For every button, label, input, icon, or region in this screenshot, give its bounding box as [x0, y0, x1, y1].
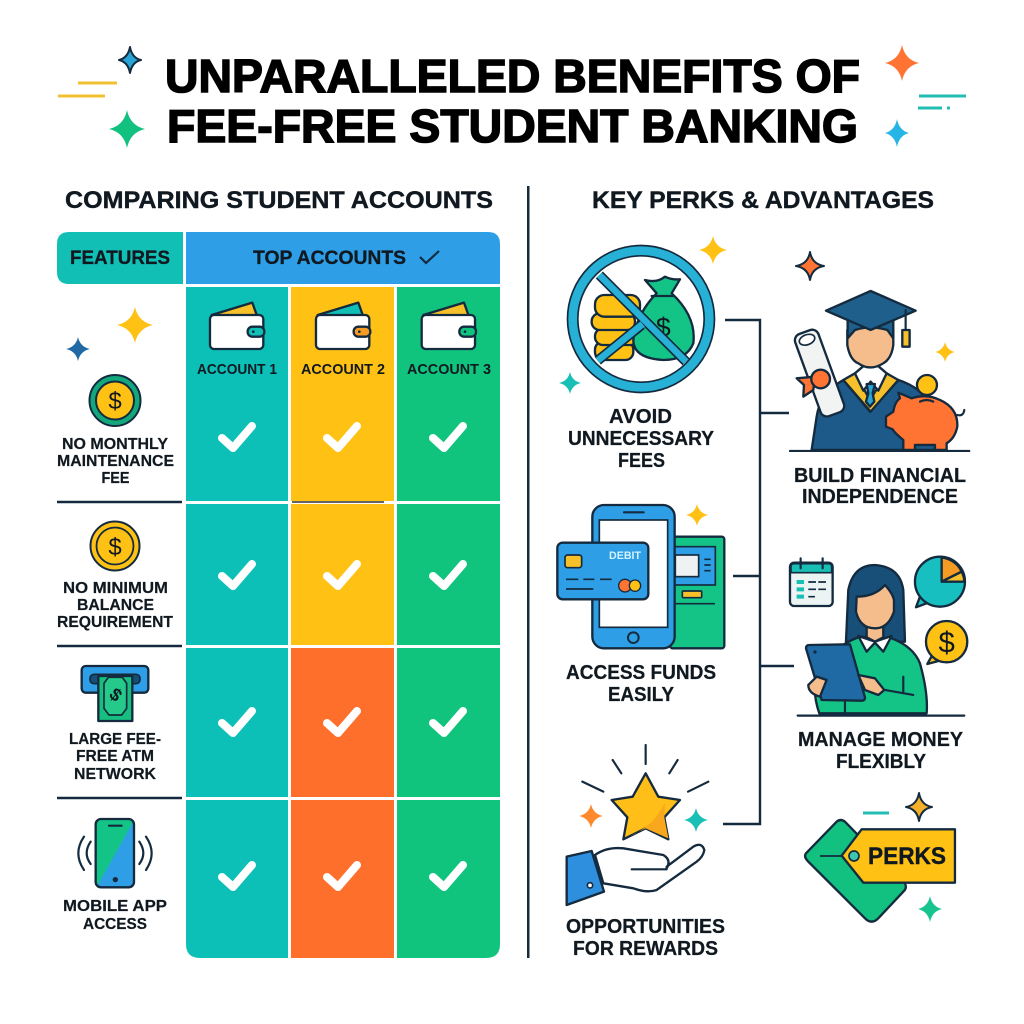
account 3 header — [407, 303, 491, 378]
account 3 header: ACCOUNT 3 — [407, 361, 491, 378]
perk: build financial independence — [790, 252, 969, 508]
feature: no minimum balance requirement: BALANCE — [77, 597, 154, 614]
icon: graduate with diploma and piggy bank — [790, 291, 969, 451]
icon: star above open hand — [567, 745, 708, 905]
column cells — [186, 287, 500, 958]
heading: comparing student accounts: COMPARING STUDENT ACCOUNTS — [65, 187, 493, 214]
icon: mobile phone with signal waves — [78, 819, 152, 887]
perks tags — [805, 793, 955, 922]
perk: avoid unnecessary fees: UNNECESSARY — [568, 428, 715, 450]
perks tags: PERKS — [868, 843, 946, 870]
perk: opportunities for rewards: OPPORTUNITIES — [566, 916, 725, 938]
sparkles and dash — [863, 793, 942, 922]
check marks — [222, 426, 463, 887]
title: FEE-FREE STUDENT BANKING — [167, 100, 858, 152]
perk: avoid unnecessary fees: AVOID — [609, 406, 672, 428]
feature: no monthly maintenance fee — [57, 375, 174, 487]
sparkles — [796, 252, 955, 362]
card label: DEBIT — [609, 550, 641, 562]
feature: no minimum balance requirement: NO MINIMUM — [63, 580, 168, 597]
icon: yellow dollar coin: $ — [108, 534, 122, 561]
perk: manage money flexibly — [790, 557, 967, 773]
header: features — [57, 232, 183, 284]
account 2 header — [301, 303, 385, 378]
feature: no monthly maintenance fee: FEE — [102, 470, 130, 487]
icon: green and yellow price tags — [805, 820, 955, 922]
title — [165, 50, 860, 152]
icon: atm cash slot: $ — [105, 684, 126, 706]
icon: woman with tablet, calendar and charts: $ — [938, 626, 955, 659]
feature: mobile app access: ACCESS — [83, 916, 147, 933]
header: features: FEATURES — [70, 248, 170, 269]
feature: no monthly maintenance fee: NO MONTHLY — [62, 436, 168, 453]
perk: access funds easily — [557, 504, 724, 706]
sparkles — [579, 804, 708, 832]
icon: green dollar coin: $ — [108, 388, 122, 415]
feature: no monthly maintenance fee: MAINTENANCE — [57, 453, 174, 470]
header: top accounts — [186, 232, 500, 284]
perk: manage money flexibly: MANAGE MONEY — [798, 729, 964, 751]
sparkle — [686, 504, 708, 526]
icon: crossed-out coins and money bag — [573, 251, 709, 387]
sparkles — [559, 236, 727, 394]
perk: access funds easily: ACCESS FUNDS — [566, 662, 716, 684]
account 2 header: ACCOUNT 2 — [301, 361, 385, 378]
perk: opportunities for rewards: FOR REWARDS — [573, 938, 718, 960]
panel divider — [527, 186, 530, 958]
feature: large fee-free atm network — [69, 666, 161, 783]
panel: comparison table — [57, 232, 500, 958]
feature: mobile app access — [63, 819, 167, 933]
heading: key perks and advantages: KEY PERKS & ADVANTAGES — [592, 187, 934, 214]
feature: large fee-free atm network: NETWORK — [74, 766, 156, 783]
perk: build financial independence: INDEPENDENCE — [802, 486, 958, 508]
perk: avoid unnecessary fees: FEES — [618, 450, 665, 472]
row dividers — [57, 502, 182, 798]
perk: access funds easily: EASILY — [608, 684, 675, 706]
feature: large fee-free atm network: LARGE FEE- — [69, 731, 161, 748]
perk: avoid unnecessary fees — [559, 236, 727, 472]
account 1 header — [197, 303, 277, 378]
perk: build financial independence: BUILD FINANCIAL — [794, 465, 966, 487]
sparkles above feature list — [66, 307, 153, 361]
perk: opportunities for rewards — [566, 745, 725, 960]
feature: mobile app access: MOBILE APP — [63, 898, 167, 915]
header: top accounts: TOP ACCOUNTS — [253, 248, 406, 269]
perk: manage money flexibly: FLEXIBLY — [836, 751, 927, 773]
feature: no minimum balance requirement: REQUIREMENT — [57, 614, 173, 631]
feature: no minimum balance requirement — [57, 522, 173, 631]
title decorations: sparkles and dashes — [58, 45, 966, 148]
title: UNPARALLELED BENEFITS OF — [165, 50, 860, 102]
feature: large fee-free atm network: FREE ATM — [76, 748, 154, 765]
connector lines — [723, 320, 794, 824]
icon: crossed-out coins and money bag: $ — [656, 313, 671, 343]
account 1 header: ACCOUNT 1 — [197, 361, 277, 378]
icon: phone, debit card and atm — [557, 505, 724, 648]
icon: woman with tablet, calendar and charts — [790, 557, 967, 716]
